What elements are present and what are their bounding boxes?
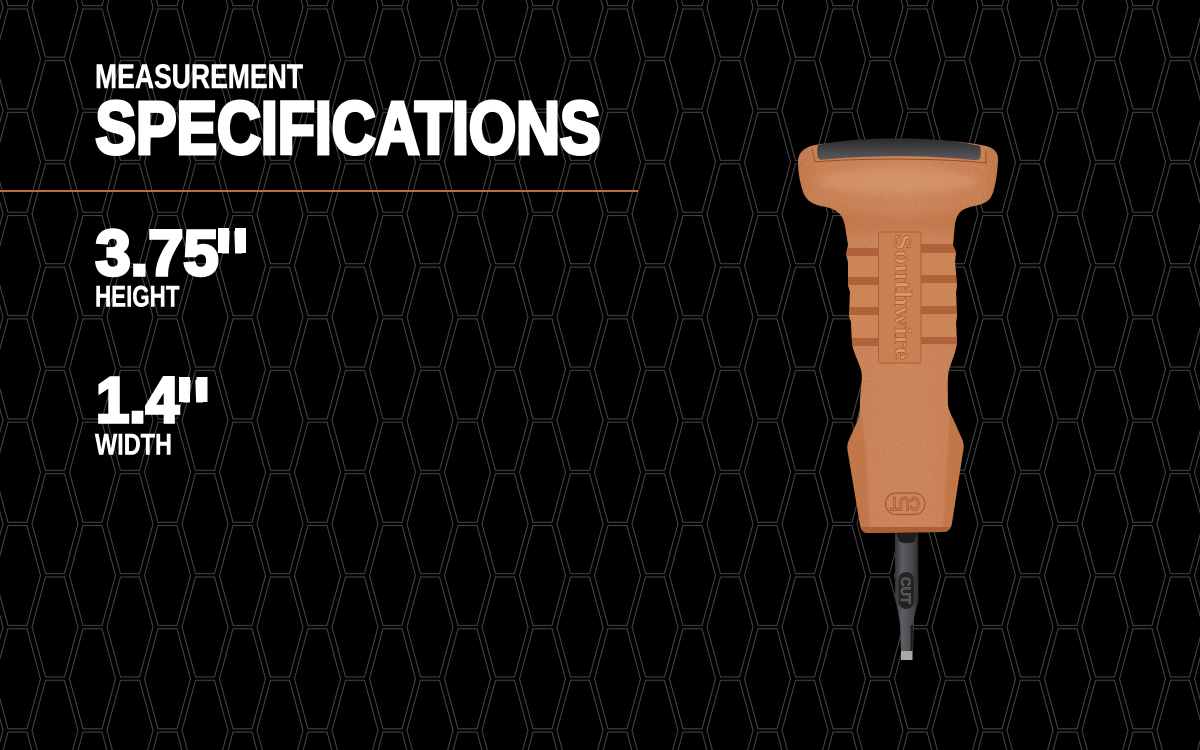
value: 1.4 inches: ": [178, 362, 208, 462]
spec: height: [95, 213, 247, 314]
logo plate: [878, 232, 921, 363]
label: HEIGHT: HEIGHT: [95, 280, 180, 314]
value: 3.75 inches: [96, 213, 247, 313]
spec: width: [95, 362, 208, 462]
divider line: [0, 190, 638, 192]
heading: MEASUREMENT: MEASUREMENT: [95, 58, 303, 96]
neck shadow: [837, 210, 960, 232]
value: 1.4 inches: 1.4: [96, 364, 179, 436]
black cap insert: [812, 138, 986, 163]
handle body: [798, 140, 998, 533]
heading block: [95, 58, 600, 170]
value: 1.4 inches: [96, 362, 208, 462]
rib grooves: [840, 244, 962, 346]
lower grip facets: [846, 412, 870, 534]
product: punch-down tool: [790, 130, 1005, 660]
raised grip blocks: [845, 253, 958, 338]
label: WIDTH: WIDTH: [95, 428, 172, 462]
shaft CUT badge: CUT: [898, 577, 914, 604]
logo: Southwire: Southwire: [889, 234, 915, 360]
tool shaft: [895, 530, 918, 660]
handle CUT badge: CUT: [890, 492, 920, 513]
value: 3.75 inches: 3.75: [96, 217, 218, 289]
heading: SPECIFICATIONS: SPECIFICATIONS: [96, 86, 600, 170]
value: 3.75 inches: ": [217, 213, 247, 313]
head highlight: [818, 168, 978, 194]
metal tip: [901, 651, 912, 660]
orange handle: [798, 138, 998, 533]
